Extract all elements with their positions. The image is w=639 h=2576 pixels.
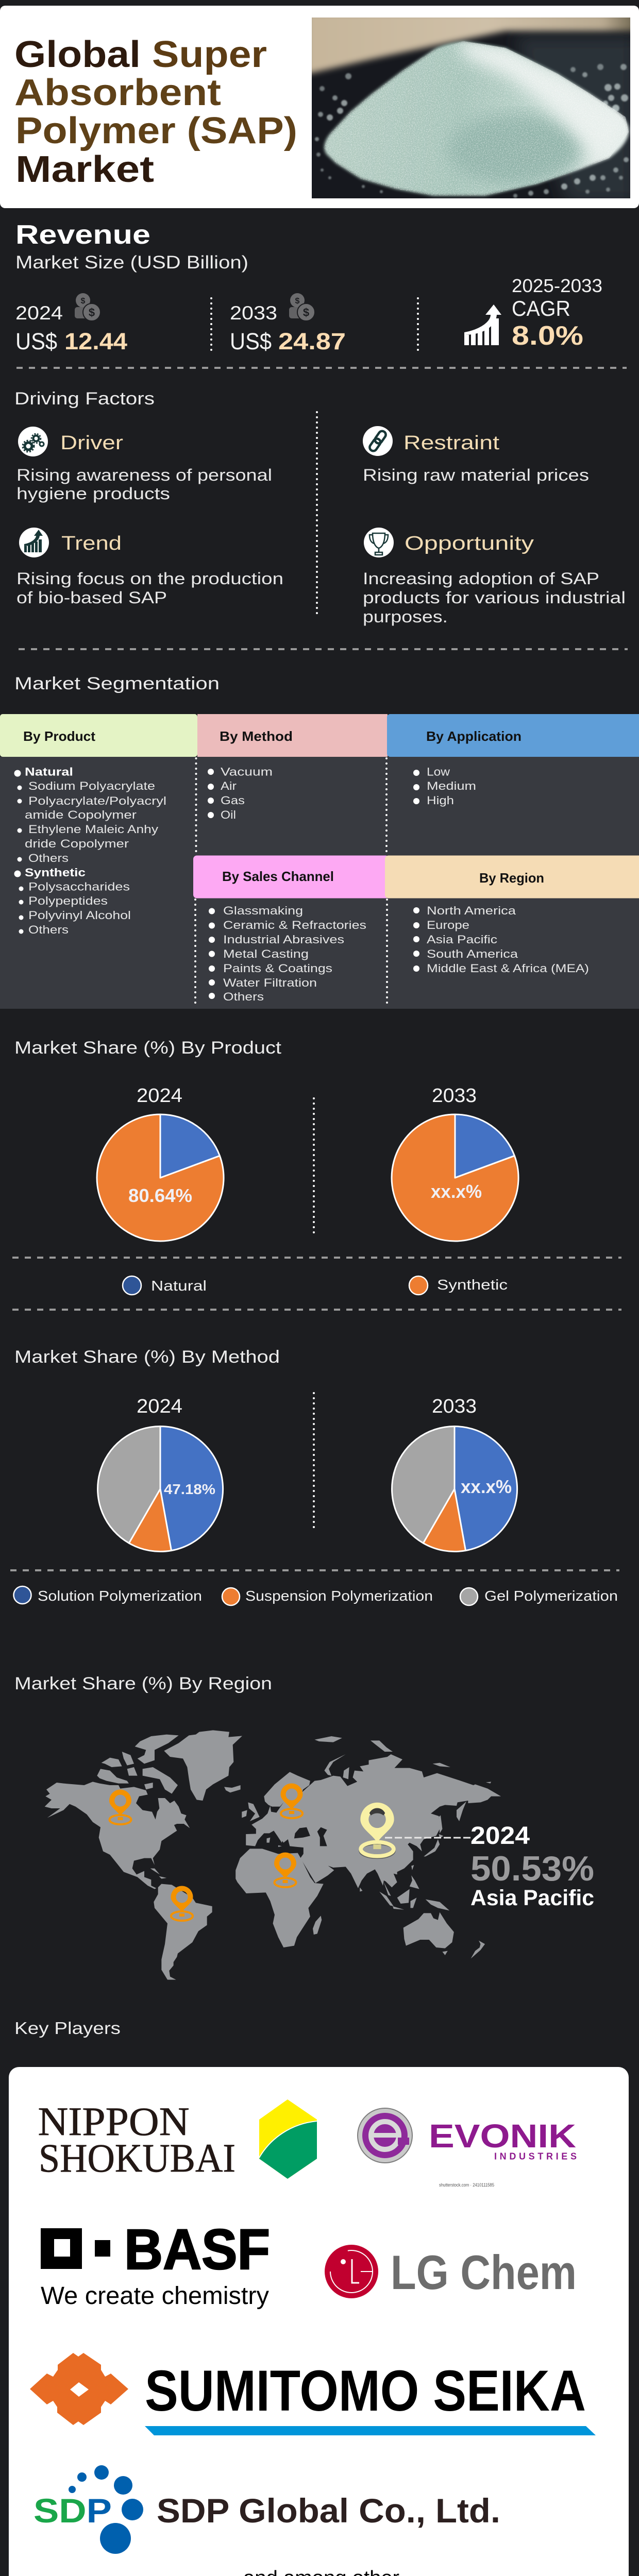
logo: nippon shokubai: SHOKUBAI: [39, 2136, 236, 2180]
market share by product section: [12, 1038, 621, 1310]
panel: by region: [385, 855, 639, 975]
panel: by product: By Product: [23, 728, 95, 744]
panel: by product: dride Copolymer: [25, 837, 129, 850]
pie chart: product 2033: [392, 1114, 518, 1241]
panel: by sales channel: By Sales Channel: [222, 869, 334, 884]
CAGR: 2025-2033: [512, 275, 602, 296]
revenue 2024: US$: [15, 328, 57, 354]
revenue 2033: [230, 302, 346, 354]
year label 2024: 2024: [137, 1396, 182, 1417]
revenue 2024: 12.44: [64, 328, 127, 354]
panel: by method: Air: [221, 779, 237, 792]
logo: sdp global: SDP: [33, 2492, 112, 2530]
logo: sdp global: [33, 2465, 500, 2554]
market share by method section: [10, 1347, 619, 1605]
opportunity heading: Opportunity: [405, 533, 534, 554]
panel: by method: Gas: [221, 794, 245, 807]
title: Global Super: [14, 34, 267, 75]
trend text: [16, 569, 283, 607]
pie chart: method 2024: 47.18%: [164, 1481, 215, 1497]
panel: by sales channel: Paints & Coatings: [223, 962, 332, 975]
icon: coins 2024: [75, 293, 100, 321]
legend: synthetic: [409, 1276, 508, 1295]
icon: trophy: [364, 528, 394, 557]
logo: sdp global: SDP Global Co., Ltd.: [157, 2492, 500, 2530]
year label 2033: 2033: [432, 1085, 477, 1107]
panel: by application: Low: [427, 766, 450, 778]
legend: natural: [123, 1276, 207, 1295]
pie chart: product 2024: 80.64%: [128, 1185, 192, 1206]
driver heading: Driver: [60, 432, 123, 454]
trend heading: Trend: [61, 533, 122, 554]
icon: coins 2033: $: [295, 297, 300, 306]
callout: asia pacific share: 2024: [470, 1822, 530, 1850]
logo: lg chem: LG Chem: [391, 2245, 577, 2299]
icon: coins 2024: $: [81, 297, 86, 306]
panel: by product: Synthetic: [25, 866, 86, 879]
logo: nippon shokubai: NIPPON: [38, 2099, 190, 2144]
key players section: [9, 2019, 629, 2576]
icon: coins 2033: $: [303, 306, 309, 319]
panel: by sales channel: Others: [223, 990, 264, 1003]
revenue 2024: [15, 302, 127, 354]
pie chart: method 2033: xx.x%: [461, 1476, 512, 1497]
callout: asia pacific share: Asia Pacific: [470, 1886, 594, 1910]
panel: by product: Sodium Polyacrylate: [28, 779, 155, 792]
icon: chain link: [363, 426, 393, 456]
pie chart: method 2033: [392, 1426, 517, 1552]
panel: by product: Ethylene Maleic Anhy: [28, 823, 158, 836]
icon: coins 2033: [289, 293, 315, 321]
pin: north america: [109, 1790, 131, 1824]
legend: gel polymerization: Gel Polymerization: [484, 1588, 618, 1604]
icon: gears: [18, 427, 48, 456]
photo: polymer powder pile: [307, 12, 635, 204]
panel: by method: By Method: [220, 728, 293, 744]
opportunity text: [363, 569, 626, 626]
driver text: hygiene products: [16, 484, 170, 503]
market share by region section: [14, 1674, 594, 1980]
restraint heading: Restraint: [403, 432, 500, 454]
panel: by sales channel: [193, 855, 389, 1003]
CAGR: CAGR: [512, 296, 570, 320]
pie chart: product 2024: [97, 1114, 224, 1241]
panel: by method: Oil: [221, 808, 236, 821]
panel: by product: Others: [28, 852, 69, 865]
logo: evonik: INDUSTRIES: [494, 2151, 577, 2162]
panel: by sales channel: Industrial Abrasives: [223, 933, 344, 946]
region share heading: Market Share (%) By Region: [14, 1674, 272, 1693]
pie chart: method 2024: [98, 1426, 223, 1552]
panel: by product: Polyacrylate/Polyacryl: [28, 794, 166, 807]
panel: key players logos: [9, 2067, 629, 2576]
year label 2033: 2033: [432, 1396, 477, 1417]
opportunity text: Increasing adoption of SAP: [363, 569, 599, 588]
title: Polymer (SAP): [15, 110, 297, 151]
panel: by product: Polypeptides: [28, 894, 108, 907]
revenue 2033: US$: [230, 328, 272, 354]
title: Absorbent: [14, 72, 221, 113]
panel: by sales channel: Glassmaking: [223, 904, 303, 917]
method share heading: Market Share (%) By Method: [14, 1347, 280, 1367]
panel: by region: By Region: [479, 870, 544, 886]
legend: synthetic: Synthetic: [437, 1277, 508, 1293]
market size label: Market Size (USD Billion): [15, 252, 248, 273]
driver text: [16, 466, 272, 503]
logo: evonik: [358, 2108, 577, 2188]
callout: asia pacific share: [470, 1822, 594, 1910]
segmentation heading: Market Segmentation: [14, 674, 220, 693]
pie chart: product 2033: xx.x%: [431, 1181, 482, 1202]
pin: south america: [171, 1886, 193, 1921]
panel: by region: Europe: [427, 919, 469, 931]
product share heading: Market Share (%) By Product: [14, 1038, 282, 1058]
legend: solution polymerization: Solution Polymerization: [38, 1588, 202, 1604]
year label 2024: 2024: [137, 1085, 182, 1107]
key players heading: Key Players: [14, 2019, 121, 2038]
title: [14, 34, 297, 190]
callout: asia pacific share: 50.53%: [470, 1849, 594, 1888]
legend: natural: Natural: [151, 1278, 207, 1294]
panel: by application: By Application: [426, 728, 522, 744]
logo: sumitomo seika: [30, 2353, 596, 2435]
driving factors heading: Driving Factors: [14, 389, 155, 409]
panel: by application: High: [427, 794, 454, 807]
market segmentation section: [0, 674, 639, 1009]
panel: by application: Medium: [427, 779, 476, 792]
pin: africa: [274, 1853, 296, 1887]
callout leader line: [385, 1837, 470, 1838]
revenue heading: Revenue: [15, 220, 150, 250]
panel: by product: [0, 714, 197, 936]
pin: europe: [280, 1784, 303, 1818]
revenue 2024: 2024: [15, 302, 63, 324]
panel: by region: Asia Pacific: [427, 933, 497, 946]
logo: basf: [41, 2218, 270, 2310]
panel: by product: amide Copolymer: [25, 808, 137, 821]
revenue section: [15, 220, 602, 354]
logo: lg chem: [325, 2245, 577, 2299]
icon: coins 2024: $: [89, 306, 95, 319]
icon: growth arrow: [464, 304, 501, 345]
panel: by product: Polysaccharides: [28, 880, 130, 893]
panel: by method: [197, 714, 388, 821]
legend: suspension polymerization: Suspension Polymerization: [245, 1588, 433, 1604]
driving factors section: [14, 389, 626, 626]
panel: by region: North America: [427, 904, 516, 917]
logo: evonik: shutterstock.com · 2410111585: [439, 2182, 494, 2188]
panel: by method: Vacuum: [221, 766, 273, 778]
pin: asia pacific highlight: [360, 1803, 394, 1858]
panel: by product: Natural: [25, 766, 73, 778]
CAGR: [512, 275, 602, 351]
panel: by application: [387, 714, 639, 807]
panel: by sales channel: Ceramic & Refractories: [223, 919, 366, 931]
logo: nippon shokubai: [38, 2099, 317, 2180]
panel: by region: South America: [427, 947, 518, 960]
trend text: Rising focus on the production: [16, 569, 283, 588]
driver text: Rising awareness of personal: [16, 466, 272, 484]
title: Market: [15, 149, 154, 190]
panel: by sales channel: Metal Casting: [223, 947, 309, 960]
revenue 2033: 2033: [230, 302, 277, 324]
logo: basf: We create chemistry: [41, 2282, 269, 2310]
icon: trend chart: [19, 528, 49, 557]
logo: basf: BASF: [124, 2218, 270, 2281]
logo: sumitomo seika: SUMITOMO SEIKA: [145, 2359, 586, 2423]
panel: by product: Others: [28, 923, 69, 936]
panel: by region: Middle East & Africa (MEA): [427, 962, 589, 975]
opportunity text: purposes.: [363, 607, 448, 626]
opportunity text: products for various industrial: [363, 588, 626, 607]
revenue 2033: 24.87: [278, 328, 346, 354]
logo: evonik: EVONIK: [429, 2117, 576, 2155]
world map: [45, 1730, 501, 1980]
CAGR: 8.0%: [512, 321, 583, 351]
header band: [0, 6, 639, 208]
restraint text: Rising raw material prices: [363, 466, 589, 484]
trend text: of bio-based SAP: [16, 588, 167, 607]
panel: by product: Polyvinyl Alcohol: [28, 909, 131, 922]
panel: by sales channel: Water Filtration: [223, 976, 317, 989]
